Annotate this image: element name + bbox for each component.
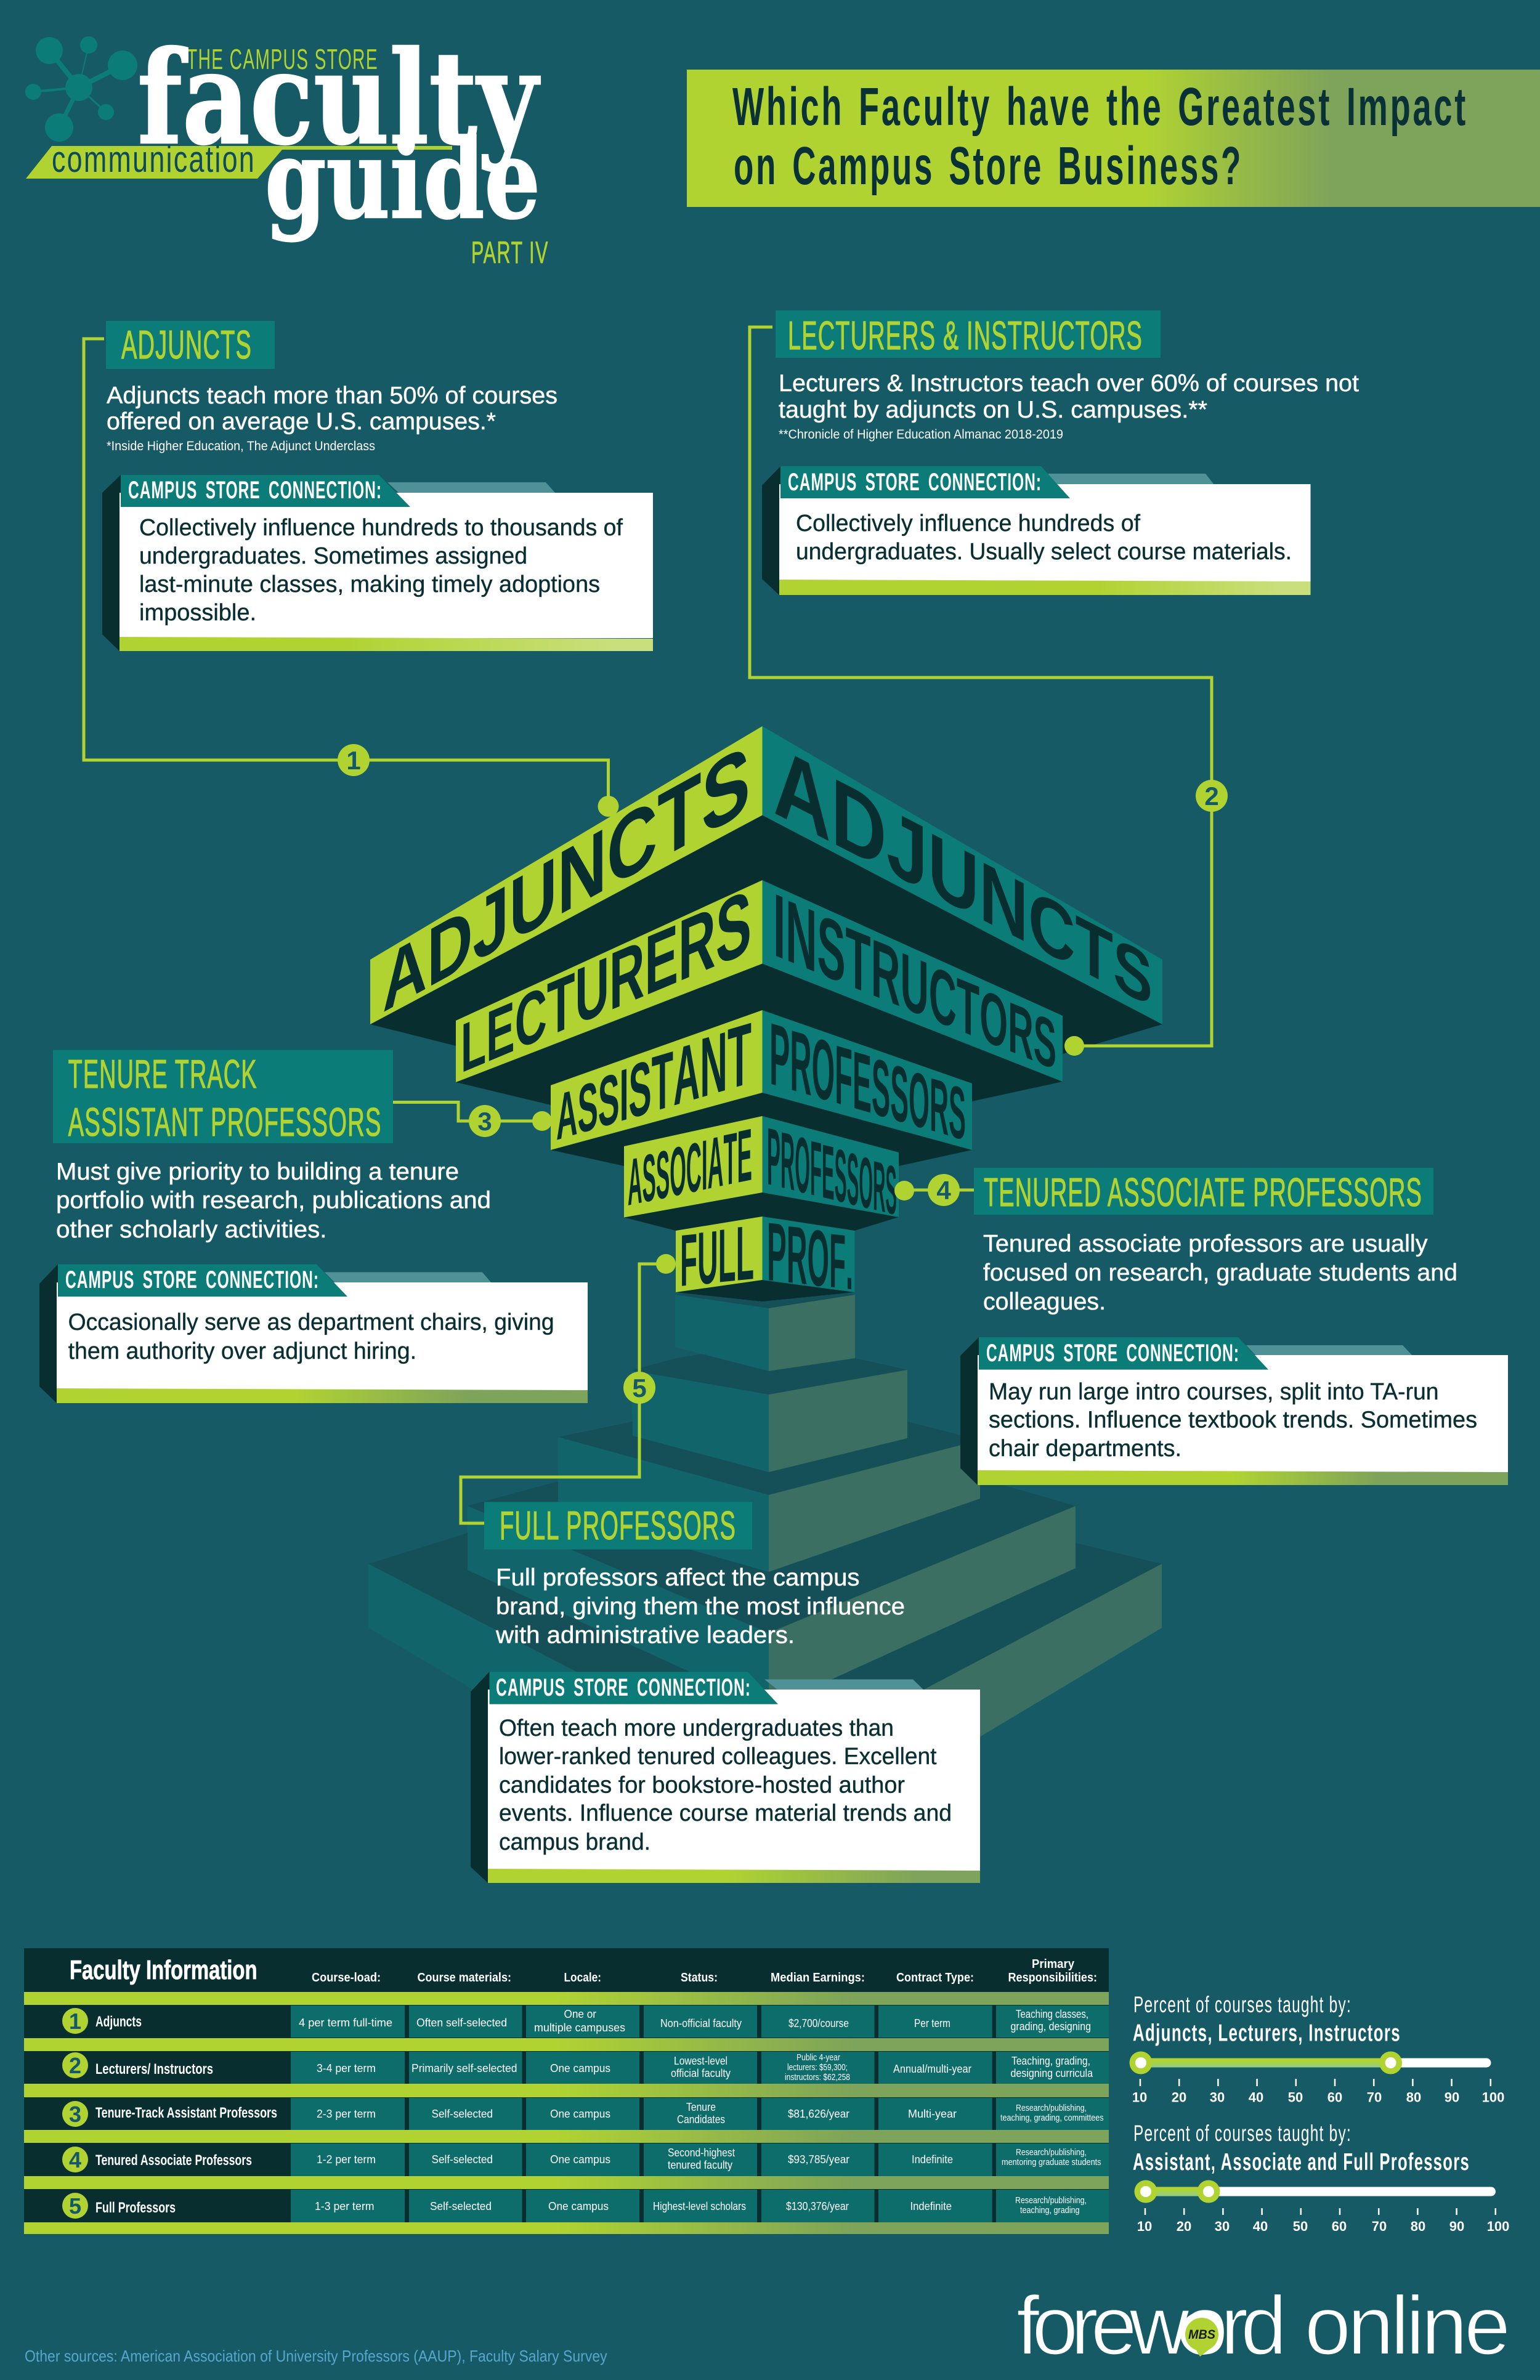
text: lecturers description: **Chronicle of Higher Education Almanac 2018-2019 — [779, 427, 1063, 442]
logo: foreword online: online — [1305, 2279, 1507, 2372]
row 5: full professors: Self-selected — [430, 2200, 492, 2212]
text: adjuncts description: *Inside Higher Education, The Adjunct Underclass — [107, 439, 375, 453]
connector 3 — [393, 1103, 552, 1137]
chart: percent taught by adjuncts, lecturers, instructors: 70 — [1367, 2090, 1382, 2105]
connector 5: 5 — [632, 1374, 647, 1402]
text: assistant professors description: portfolio with research, publications and — [56, 1188, 491, 1213]
row 4: tenured associate professors: $93,785/year — [788, 2153, 849, 2166]
step 1 — [675, 1281, 855, 1371]
row 4: tenured associate professors: Indefinite — [912, 2153, 953, 2166]
heading: tenure track assistant professors — [53, 1050, 393, 1144]
tier: associate professors: PROFESSORS — [767, 1111, 897, 1232]
the campus store: THE CAMPUS STORE — [187, 43, 378, 75]
row 1: adjuncts: Per term — [914, 2017, 950, 2030]
text: lecturers description — [779, 370, 1359, 442]
chart: percent taught by adjuncts, lecturers, instructors: Adjuncts, Lecturers, Instructors — [1133, 2020, 1401, 2046]
row 4: tenured associate professors: tenured faculty — [668, 2159, 732, 2171]
row 2: lecturers and instructors: Teaching, grading, — [1011, 2055, 1090, 2067]
row 1: adjuncts: 4 per term full-time — [299, 2017, 392, 2029]
row 3: tenure-track assistant professors: $81,626/year — [788, 2108, 849, 2120]
logo: foreword online: foreword — [1016, 2279, 1282, 2372]
heading: full professors: FULL PROFESSORS — [500, 1503, 736, 1548]
row 5: full professors: Highest-level scholars — [653, 2200, 746, 2212]
callout: campus store connection: CAMPUS STORE CONNECTION: — [788, 469, 1042, 496]
faculty: faculty — [137, 23, 540, 174]
text: associate professors description: Tenured associate professors are usually — [983, 1231, 1428, 1257]
row 5: full professors — [62, 2193, 1087, 2219]
chart: percent taught by adjuncts, lecturers, instructors: Percent of courses taught by: — [1133, 1992, 1352, 2017]
callout: campus store connection: CAMPUS STORE CONNECTION: — [986, 1340, 1239, 1367]
row 4: tenured associate professors: mentoring graduate students — [1002, 2157, 1101, 2168]
row 4: tenured associate professors: 4 — [69, 2147, 81, 2172]
table header row — [70, 1955, 1097, 1985]
table header row: Course materials: — [418, 1971, 511, 1985]
row 2: lecturers and instructors — [62, 2052, 1093, 2082]
panel: adjuncts — [102, 321, 653, 651]
row 3: tenure-track assistant professors: teaching, grading, committees — [1000, 2113, 1104, 2123]
callout: campus store connection: last-minute classes, making timely adoptions — [139, 572, 600, 597]
chart: percent taught by adjuncts, lecturers, instructors: 10 — [1132, 2090, 1147, 2105]
connector 4 — [894, 1174, 974, 1206]
step 5 — [368, 1417, 1162, 1863]
row 2: lecturers and instructors: One campus — [550, 2062, 610, 2074]
row 1: adjuncts: Adjuncts — [95, 2014, 142, 2030]
text: lecturers description: taught by adjuncts on U.S. campuses.** — [779, 397, 1207, 423]
callout: campus store connection: Collectively influence hundreds to thousands of — [139, 515, 623, 541]
heading: tenure track assistant professors: ASSISTANT PROFESSORS — [68, 1099, 382, 1144]
chart: percent taught by adjuncts, lecturers, instructors: 40 — [1249, 2090, 1263, 2105]
icon: mbs speech bubble — [1180, 2312, 1223, 2357]
heading: full professors — [484, 1502, 752, 1550]
chart: percent taught by assistant, associate and full professors: 10 — [1137, 2219, 1152, 2234]
callout: campus store connection: Collectively influence hundreds of — [796, 511, 1140, 536]
text: full professors description: Full professors affect the campus — [496, 1564, 860, 1591]
chart: percent taught by assistant, associate and full professors: 30 — [1215, 2219, 1230, 2234]
row 3: tenure-track assistant professors: 3 — [69, 2102, 81, 2127]
row 2: lecturers and instructors: Lowest-level — [674, 2055, 727, 2067]
text: full professors description: brand, giving them the most influence — [496, 1593, 905, 1620]
row 3: tenure-track assistant professors: 2-3 per term — [317, 2108, 376, 2120]
text: adjuncts description: offered on average U.S. campuses.* — [107, 408, 496, 435]
callout: campus store connection: chair departments. — [989, 1436, 1181, 1462]
text: associate professors description: focused on research, graduate students and — [983, 1260, 1457, 1286]
part iv: PART IV — [471, 235, 549, 270]
table header row: Course-load: — [312, 1971, 381, 1985]
chart: percent taught by assistant, associate and full professors: 70 — [1372, 2219, 1387, 2234]
callout: campus store connection: CAMPUS STORE CONNECTION: — [128, 477, 382, 504]
text: associate professors description: colleagues. — [983, 1289, 1106, 1315]
panel: tenure track assistant professors — [39, 1050, 588, 1403]
row 5: full professors: One campus — [548, 2200, 609, 2212]
chart: percent taught by assistant, associate and full professors: 90 — [1449, 2219, 1464, 2234]
stepped pyramid base — [368, 1281, 1162, 1863]
table header row: Locale: — [564, 1971, 601, 1985]
connector 2: 2 — [1204, 782, 1219, 811]
row 1: adjuncts: $2,700/course — [788, 2017, 849, 2030]
text: assistant professors description: Must give priority to building a tenure — [56, 1159, 459, 1185]
row 2: lecturers and instructors: lecturers: $59,300; — [787, 2062, 848, 2073]
table header row: Contract Type: — [896, 1971, 974, 1985]
table header row: Median Earnings: — [771, 1971, 865, 1985]
chart: percent taught by assistant, associate and full professors: 50 — [1293, 2219, 1308, 2234]
callout: campus store connection: events. Influence course material trends and — [499, 1800, 952, 1826]
row 4: tenured associate professors: Second-highest — [668, 2147, 735, 2159]
row 2: lecturers and instructors: instructors: $62,258 — [785, 2072, 850, 2082]
tier: full professors — [676, 1204, 855, 1307]
text: assistant professors description — [56, 1159, 491, 1243]
chart: percent taught by adjuncts, lecturers, instructors: 50 — [1288, 2090, 1303, 2105]
callout: campus store connection: May run large intro courses, split into TA-run — [989, 1379, 1439, 1405]
step 2 — [631, 1343, 907, 1472]
table header row: Faculty Information — [70, 1955, 257, 1985]
chart: percent taught by assistant, associate and full professors: 80 — [1411, 2219, 1425, 2234]
row 2: lecturers and instructors: Annual/multi-year — [893, 2063, 971, 2075]
tier: lecturers and instructors: INSTRUCTORS — [773, 873, 1056, 1089]
row 5: full professors: $130,376/year — [786, 2200, 849, 2212]
row 2: lecturers and instructors: Primarily self-selected — [411, 2062, 517, 2074]
chart: percent taught by adjuncts, lecturers, instructors — [1130, 1992, 1504, 2105]
chart: percent taught by adjuncts, lecturers, instructors: 60 — [1327, 2090, 1342, 2105]
row 1: adjuncts: Teaching classes, — [1016, 2008, 1088, 2020]
heading: lecturers and instructors — [776, 310, 1161, 358]
row 1: adjuncts: multiple campuses — [534, 2022, 625, 2034]
chart: percent taught by adjuncts, lecturers, instructors: 90 — [1445, 2090, 1459, 2105]
row 4: tenured associate professors — [62, 2147, 1101, 2172]
table: faculty information — [24, 1948, 1109, 2234]
row 1: adjuncts: grading, designing — [1010, 2020, 1091, 2033]
tier: full professors: PROF. — [767, 1204, 853, 1307]
callout: campus store connection: impossible. — [139, 600, 256, 626]
chart: percent taught by assistant, associate and full professors: 40 — [1253, 2219, 1268, 2234]
text: adjuncts description: Adjuncts teach more than 50% of courses — [107, 382, 557, 409]
row 2: lecturers and instructors: designing curricula — [1010, 2067, 1093, 2079]
cell backgrounds — [291, 2006, 1109, 2222]
callout: campus store connection: campus brand. — [499, 1829, 650, 1855]
text: full professors description: with administrative leaders. — [495, 1622, 795, 1648]
connector 1: 1 — [346, 746, 361, 775]
chart: percent taught by adjuncts, lecturers, instructors: 20 — [1172, 2090, 1186, 2105]
tier: assistant professors — [551, 1004, 972, 1166]
text: lecturers description: Lecturers & Instructors teach over 60% of courses not — [779, 370, 1359, 397]
callout: campus store connection: candidates for bookstore-hosted author — [499, 1773, 905, 1799]
tier: associate professors: ASSOCIATE — [628, 1112, 752, 1221]
icon: molecule network — [25, 36, 137, 142]
row 5: full professors: 1-3 per term — [315, 2200, 375, 2212]
callout: campus store connection: lower-ranked tenured colleagues. Excellent — [499, 1744, 937, 1770]
connector 2 — [750, 327, 1228, 1056]
connector 4: 4 — [936, 1176, 951, 1205]
tier: associate professors — [624, 1111, 899, 1232]
chart: percent taught by assistant, associate and full professors: 100 — [1487, 2219, 1509, 2234]
row 3: tenure-track assistant professors: Tenure — [686, 2101, 716, 2113]
callout: campus store connection: undergraduates. Sometimes assigned — [139, 543, 527, 569]
table header row: Primary — [1032, 1957, 1075, 1971]
connector 1 — [84, 339, 618, 817]
callout: campus store connection: Often teach more undergraduates than — [499, 1715, 894, 1741]
communication banner — [26, 139, 452, 180]
heading: lecturers and instructors: LECTURERS & INSTRUCTORS — [788, 313, 1143, 358]
text: assistant professors description: other scholarly activities. — [56, 1216, 326, 1243]
callout: campus store connection — [102, 475, 653, 651]
table header row: Responsibilities: — [1008, 1971, 1097, 1985]
tier: adjuncts: ADJUNCTS — [773, 724, 1153, 1029]
row 2: lecturers and instructors: 2 — [69, 2053, 81, 2078]
tier: lecturers and instructors — [456, 870, 1063, 1105]
chart: percent taught by assistant, associate and full professors: Percent of courses taught by: — [1133, 2121, 1352, 2146]
row 4: tenured associate professors: 1-2 per term — [317, 2153, 376, 2166]
row 2: lecturers and instructors: Lecturers/ Instructors — [95, 2061, 213, 2078]
heading: tenure track assistant professors: TENURE TRACK — [68, 1051, 257, 1096]
chart: percent taught by adjuncts, lecturers, instructors: 80 — [1406, 2090, 1421, 2105]
step 3 — [558, 1386, 980, 1572]
row 5: full professors: teaching, grading — [1020, 2205, 1079, 2216]
callout: campus store connection: CAMPUS STORE CONNECTION: — [65, 1266, 319, 1293]
lime row separators — [24, 1992, 1109, 2234]
tier: adjuncts — [370, 723, 1162, 1054]
row 4: tenured associate professors: Research/publishing, — [1016, 2147, 1087, 2158]
text: full professors description — [495, 1564, 905, 1648]
inverted pyramid of faculty ranks — [370, 723, 1162, 1307]
panel: full professors — [471, 1502, 980, 1883]
logo: faculty communication guide — [25, 23, 549, 270]
step 4 — [468, 1380, 1076, 1708]
tier: adjuncts: ADJUNCTS — [383, 723, 750, 1034]
icon: mbs speech bubble: MBS — [1188, 2328, 1215, 2342]
callout: campus store connection — [471, 1672, 980, 1883]
callout: campus store connection: them authority over adjunct hiring. — [68, 1338, 416, 1364]
callout: campus store connection: sections. Influence textbook trends. Sometimes — [989, 1407, 1477, 1433]
tier: assistant professors: ASSISTANT — [556, 1004, 752, 1159]
row 5: full professors: 5 — [69, 2193, 81, 2219]
text: associate professors description — [983, 1231, 1457, 1315]
chart: percent taught by assistant, associate and full professors: 60 — [1332, 2219, 1347, 2234]
connector 5 — [461, 1254, 676, 1523]
row 3: tenure-track assistant professors: Multi-year — [908, 2108, 957, 2120]
row 2: lecturers and instructors: 3-4 per term — [317, 2062, 376, 2074]
callout: campus store connection — [762, 466, 1311, 595]
row 4: tenured associate professors: Self-selected — [431, 2153, 493, 2166]
row 1: adjuncts: Often self-selected — [416, 2017, 507, 2029]
callout: campus store connection: Occasionally serve as department chairs, giving — [68, 1309, 554, 1335]
chart: percent taught by assistant, associate and full professors: 20 — [1177, 2219, 1191, 2234]
sources note: Other sources: American Association of University Professors (AAUP), Faculty Salary Survey — [25, 2347, 607, 2365]
callout: campus store connection: undergraduates. Usually select course materials. — [796, 539, 1292, 565]
row 3: tenure-track assistant professors: Candidates — [677, 2113, 725, 2126]
row 3: tenure-track assistant professors — [62, 2101, 1104, 2127]
row 2: lecturers and instructors: official faculty — [671, 2067, 731, 2079]
heading: adjuncts — [106, 321, 275, 369]
row 4: tenured associate professors: Tenured Associate Professors — [95, 2152, 252, 2169]
table header row: Status: — [681, 1971, 718, 1985]
row 5: full professors: Full Professors — [95, 2200, 176, 2216]
table background — [24, 1948, 1109, 2234]
row 5: full professors: Research/publishing, — [1015, 2195, 1087, 2206]
row 1: adjuncts: 1 — [69, 2009, 81, 2034]
row 3: tenure-track assistant professors: Research/publishing, — [1016, 2103, 1087, 2113]
row 5: full professors: Indefinite — [910, 2200, 952, 2212]
title banner — [687, 70, 1540, 207]
chart: percent taught by assistant, associate and full professors — [1133, 2121, 1509, 2234]
row 4: tenured associate professors: One campus — [550, 2153, 610, 2166]
row 3: tenure-track assistant professors: Tenure-Track Assistant Professors — [95, 2105, 277, 2121]
row 3: tenure-track assistant professors: One campus — [550, 2108, 610, 2120]
chart: percent taught by adjuncts, lecturers, instructors: 30 — [1210, 2090, 1225, 2105]
guide: guide — [265, 115, 540, 243]
row 3: tenure-track assistant professors: Self-selected — [431, 2108, 493, 2120]
communication banner: communication — [52, 139, 256, 180]
heading: adjuncts: ADJUNCTS — [121, 322, 252, 367]
callout: campus store connection — [960, 1337, 1508, 1485]
panel: tenured associate professors — [960, 1168, 1508, 1485]
row 1: adjuncts — [62, 2008, 1091, 2034]
tier: lecturers and instructors: LECTURERS — [461, 870, 752, 1093]
logo: foreword online — [1016, 2279, 1507, 2372]
connector 3: 3 — [477, 1107, 492, 1136]
row 1: adjuncts: One or — [564, 2008, 596, 2020]
chart: percent taught by adjuncts, lecturers, instructors: 100 — [1482, 2090, 1504, 2105]
callout: campus store connection: CAMPUS STORE CONNECTION: — [496, 1674, 751, 1701]
row 1: adjuncts: Non-official faculty — [660, 2017, 742, 2030]
tier: full professors: FULL — [680, 1209, 754, 1303]
callout: campus store connection — [39, 1264, 588, 1403]
tier: assistant professors: PROFESSORS — [769, 1004, 966, 1159]
panel: lecturers and instructors — [762, 310, 1359, 595]
text: adjuncts description — [107, 382, 557, 453]
row 2: lecturers and instructors: Public 4-year — [796, 2052, 840, 2063]
